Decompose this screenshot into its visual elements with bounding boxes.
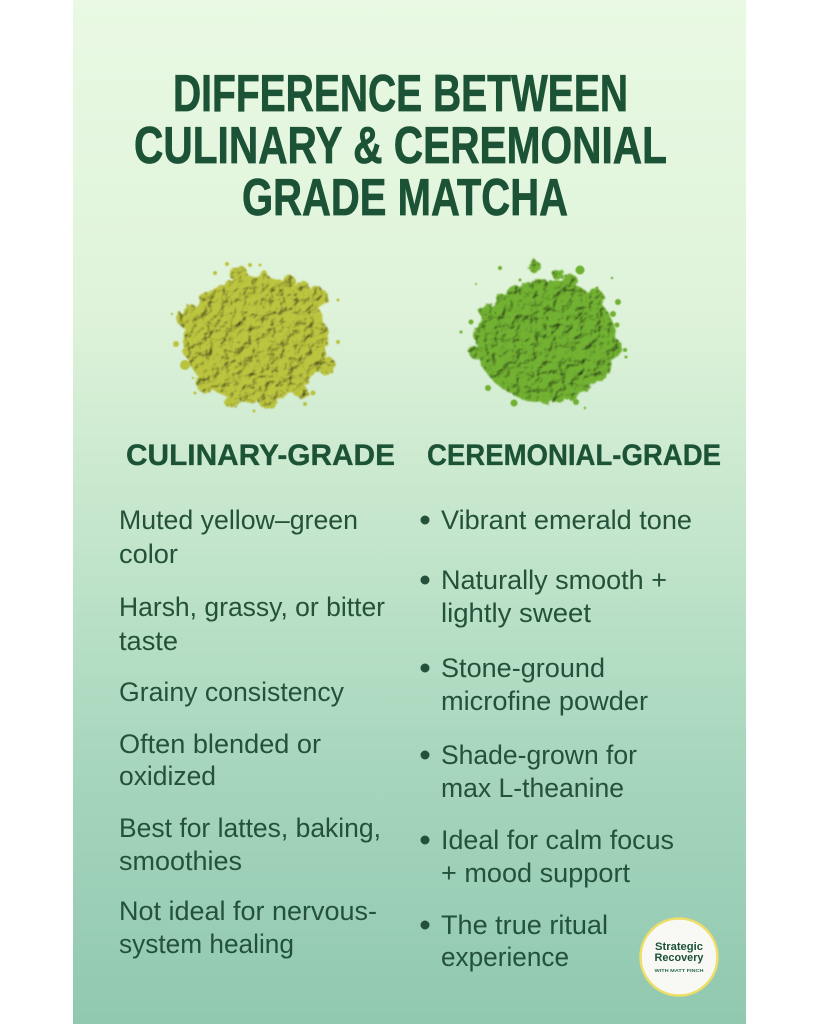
list: culinary traits: Not ideal for nervous- xyxy=(119,896,377,926)
list: ceremonial traits: lightly sweet xyxy=(441,598,592,628)
logo badge: Strategic Recovery: WITH MATT FINCH xyxy=(654,968,704,973)
list: ceremonial traits: The true ritual xyxy=(441,910,608,940)
title: CULINARY & CEREMONIAL xyxy=(134,117,667,175)
list: culinary traits: Often blended or xyxy=(119,729,321,759)
list: culinary traits: Grainy consistency xyxy=(119,677,345,707)
list: ceremonial traits: Shade-grown for xyxy=(441,740,637,770)
heading: ceremonial-grade: CEREMONIAL-GRADE xyxy=(427,439,721,472)
list: culinary traits xyxy=(119,505,385,959)
image: ceremonial matcha powder pile xyxy=(460,261,628,409)
list: culinary traits: Harsh, grassy, or bitter xyxy=(119,592,385,622)
list: culinary traits: Muted yellow–green xyxy=(119,505,358,535)
list: culinary traits: Best for lattes, baking, xyxy=(119,813,381,843)
list: ceremonial traits: max L-theanine xyxy=(441,773,624,803)
list: ceremonial traits: + mood support xyxy=(441,858,631,888)
logo badge: Strategic Recovery: Recovery xyxy=(654,952,704,964)
list: culinary traits: color xyxy=(119,539,178,569)
list: ceremonial traits: microfine powder xyxy=(441,686,648,716)
list: ceremonial traits: Stone-ground xyxy=(441,653,605,683)
image: culinary matcha powder pile xyxy=(171,262,340,412)
list: culinary traits: oxidized xyxy=(119,761,216,791)
list: culinary traits: smoothies xyxy=(119,846,242,876)
logo badge: Strategic Recovery: Strategic xyxy=(655,941,703,953)
heading: culinary-grade: CULINARY-GRADE xyxy=(126,439,395,472)
list: ceremonial traits: experience xyxy=(441,942,569,972)
list: culinary traits: system healing xyxy=(119,929,294,959)
title: GRADE MATCHA xyxy=(242,169,568,227)
title: DIFFERENCE BETWEEN xyxy=(173,65,628,123)
list: ceremonial traits: Naturally smooth + xyxy=(441,565,667,595)
logo badge: Strategic Recovery xyxy=(640,918,718,996)
list: ceremonial traits: Vibrant emerald tone xyxy=(441,505,692,535)
list: culinary traits: taste xyxy=(119,626,178,656)
list: ceremonial traits: Ideal for calm focus xyxy=(441,825,674,855)
list: ceremonial traits xyxy=(420,505,692,972)
title xyxy=(134,65,667,227)
